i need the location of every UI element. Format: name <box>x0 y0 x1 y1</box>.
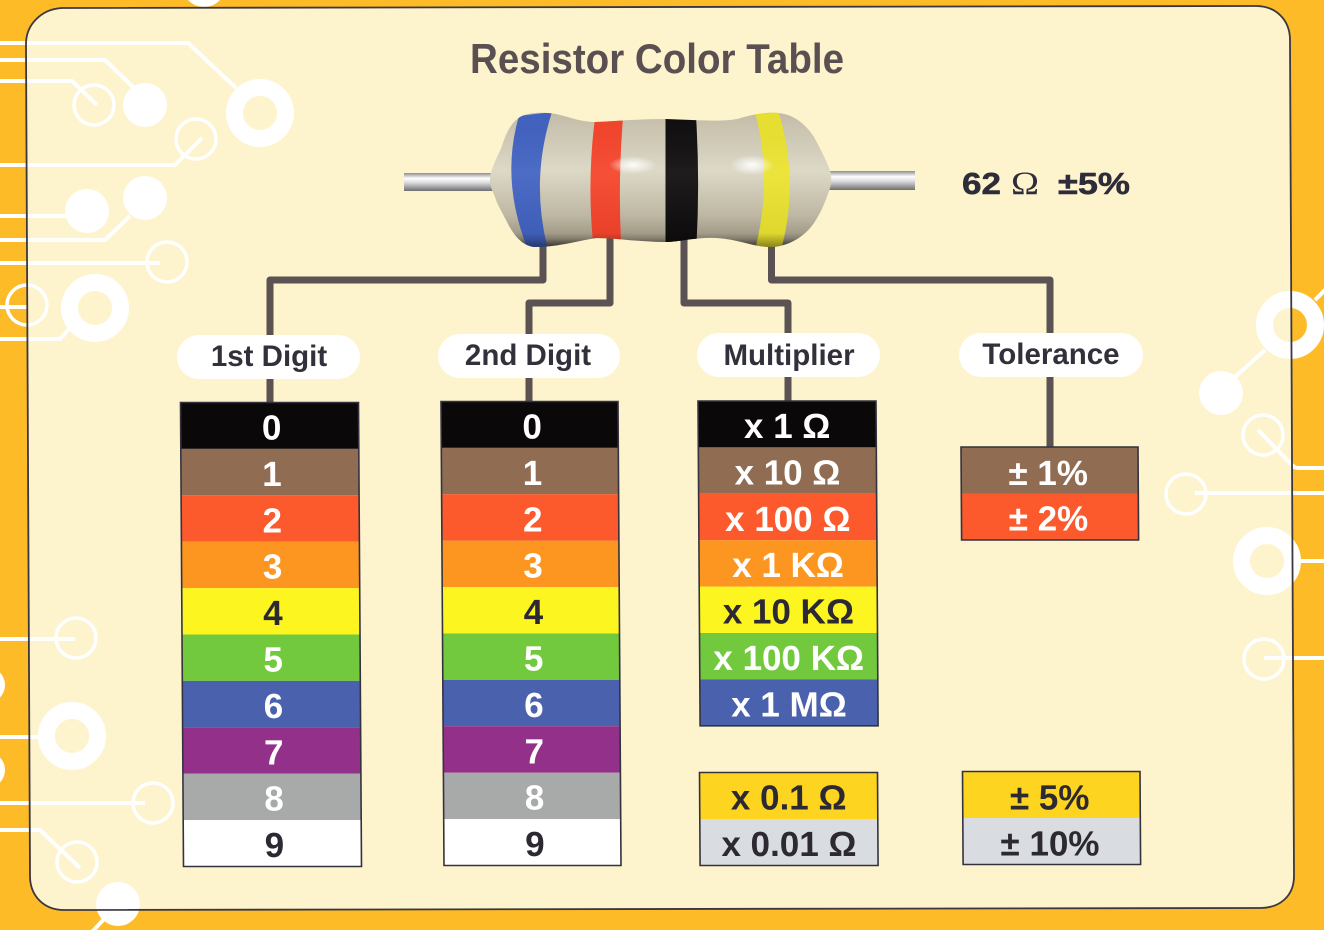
row: black 0: 0 <box>522 408 542 446</box>
row: violet 7: 7 <box>264 733 284 772</box>
row: red x 100 ohm: x 100 Ω <box>725 500 851 539</box>
resistor value label: 62 <box>962 166 1001 201</box>
row: black 0: 0 <box>262 409 282 447</box>
row: green 5: 5 <box>263 641 283 679</box>
row: brown x 10 ohm: x 10 Ω <box>734 453 841 492</box>
row: gray 8 <box>183 774 361 820</box>
row: red 2 <box>442 494 619 541</box>
table: multiplier <box>698 401 878 726</box>
resistor value label <box>962 166 1130 202</box>
row: orange x 1 kilo-ohm <box>699 540 877 587</box>
right lead <box>828 171 915 190</box>
row: blue 6 <box>182 681 361 727</box>
band: red <box>590 118 623 242</box>
row: yellow x 10 kilo-ohm: x 10 KΩ <box>723 593 854 632</box>
row: green 5 <box>442 634 620 680</box>
band: black <box>666 116 698 244</box>
row: red 2: 2 <box>262 501 282 540</box>
row: gray 8 <box>443 773 621 819</box>
table: tolerance brown and red <box>961 447 1139 540</box>
resistor value label: ±5% <box>1058 166 1130 201</box>
row: blue x 1 mega-ohm <box>700 679 878 726</box>
row: black x 1 ohm <box>698 401 876 447</box>
row: yellow 4: 4 <box>263 594 283 633</box>
row: gray 8: 8 <box>525 779 544 818</box>
row: yellow 4: 4 <box>524 593 544 632</box>
row: red 2 percent <box>961 494 1139 540</box>
row: yellow x 10 kilo-ohm <box>699 587 877 633</box>
row: yellow 4 <box>182 588 360 634</box>
heading pill: 1st Digit <box>177 335 360 379</box>
row: orange 3 <box>442 541 619 587</box>
row: gold 5 percent: ± 5% <box>1010 779 1090 817</box>
row: red x 100 ohm <box>699 494 877 540</box>
heading pill: Multiplier: Multiplier <box>723 339 855 372</box>
row: silver 10 percent: ± 10% <box>1000 825 1100 863</box>
row: green x 100 kilo-ohm: x 100 KΩ <box>713 639 864 678</box>
circuit traces left side <box>0 0 286 930</box>
row: gold x 0.1 ohm <box>700 772 878 819</box>
row: brown 1 percent: ± 1% <box>1008 454 1088 493</box>
row: black 0 <box>441 402 618 448</box>
circuit traces right side <box>1166 289 1324 679</box>
row: brown x 10 ohm <box>698 447 877 494</box>
row: black x 1 ohm: x 1 Ω <box>744 407 831 446</box>
row: white 9 <box>444 819 621 866</box>
row: white 9: 9 <box>525 825 545 864</box>
row: yellow 4 <box>442 587 619 634</box>
row: gold x 0.1 ohm: x 0.1 Ω <box>731 779 847 817</box>
row: brown 1 <box>441 448 619 494</box>
row: red 2 <box>181 495 359 542</box>
row: blue 6: 6 <box>524 686 544 725</box>
resistor illustration <box>404 110 915 250</box>
row: violet 7: 7 <box>524 732 544 771</box>
heading pill: 2nd Digit <box>438 334 620 378</box>
row: violet 7 <box>443 726 620 773</box>
row: silver x 0.01 ohm <box>700 819 878 866</box>
row: gold 5 percent <box>962 772 1140 818</box>
row: brown 1 <box>181 449 359 495</box>
connector wires <box>270 235 1050 448</box>
heading pill: Multiplier <box>697 333 880 377</box>
row: blue 6: 6 <box>264 687 283 726</box>
row: green 5: 5 <box>524 640 544 678</box>
band: yellow <box>755 110 790 250</box>
title: Resistor Color Table <box>470 35 844 82</box>
heading pill: Tolerance <box>959 333 1143 377</box>
row: brown 1 percent <box>961 447 1138 494</box>
row: blue x 1 mega-ohm: x 1 MΩ <box>731 685 847 724</box>
row: brown 1: 1 <box>262 455 282 494</box>
row: red 2 percent: ± 2% <box>1009 500 1088 538</box>
table: multiplier gold and silver <box>700 772 878 866</box>
resistor body <box>480 110 840 250</box>
row: silver 10 percent <box>963 818 1141 864</box>
row: violet 7 <box>183 727 361 774</box>
heading pill: Tolerance: Tolerance <box>982 338 1120 371</box>
row: black 0 <box>180 402 359 449</box>
row: silver x 0.01 ohm: x 0.01 Ω <box>721 825 857 864</box>
row: brown 1: 1 <box>523 454 542 493</box>
resistor value label: Ω <box>1011 166 1039 202</box>
row: white 9 <box>183 820 361 866</box>
row: orange 3 <box>181 542 360 588</box>
heading pill: 1st Digit: 1st Digit <box>211 340 327 373</box>
table: tolerance gold and silver <box>962 772 1141 864</box>
row: orange 3: 3 <box>523 547 543 586</box>
left lead <box>404 173 494 191</box>
table: 2nd digit <box>441 402 621 866</box>
band: blue <box>511 112 552 250</box>
row: green 5 <box>182 634 360 681</box>
heading pill: 2nd Digit: 2nd Digit <box>465 339 591 372</box>
row: red 2: 2 <box>523 500 543 539</box>
row: gray 8: 8 <box>264 780 284 819</box>
table: 1st digit <box>180 402 361 866</box>
row: orange 3: 3 <box>263 548 282 587</box>
row: orange x 1 kilo-ohm: x 1 KΩ <box>732 546 844 585</box>
row: white 9: 9 <box>265 826 284 865</box>
row: blue 6 <box>443 680 620 726</box>
